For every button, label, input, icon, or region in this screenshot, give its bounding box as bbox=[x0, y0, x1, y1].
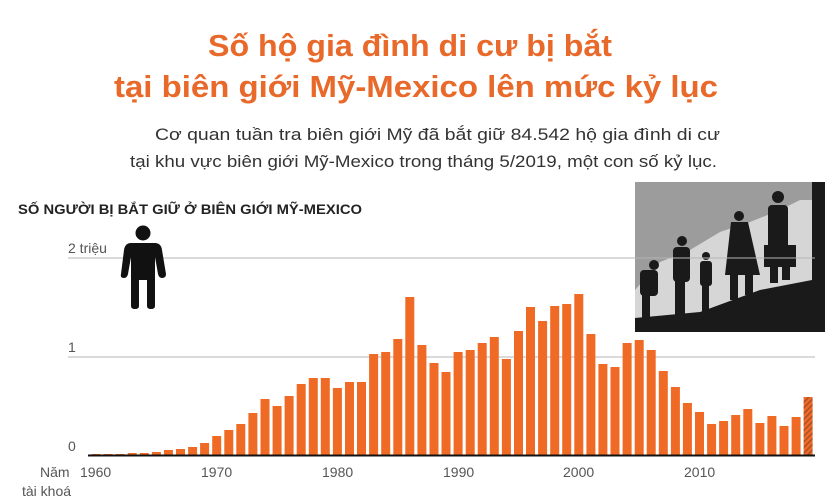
x axis bbox=[88, 454, 815, 456]
year labels: 2010 bbox=[684, 464, 715, 480]
chart title: SỐ NGƯỜI BỊ BẮT GIỮ Ở BIÊN GIỚI MỸ-MEXICO bbox=[18, 200, 362, 217]
year labels: 2000 bbox=[563, 464, 594, 480]
year labels bbox=[22, 464, 715, 499]
year labels: Năm bbox=[40, 464, 70, 480]
axis labels: 0 bbox=[68, 438, 76, 454]
subtitle: Cơ quan tuần tra biên giới Mỹ đã bắt giữ 84.542 hộ gia đình di cư bbox=[155, 125, 720, 144]
subtitle bbox=[130, 125, 720, 171]
icon: person bbox=[121, 226, 166, 309]
title: tại biên giới Mỹ-Mexico lên mức kỷ lục bbox=[114, 69, 718, 104]
axis labels: 1 bbox=[68, 339, 76, 355]
year labels: tài khoá bbox=[22, 483, 71, 499]
bar chart bbox=[92, 294, 801, 455]
axis labels: 2 triệu bbox=[68, 240, 107, 256]
year labels: 1980 bbox=[322, 464, 353, 480]
bar: 2019 hatched bbox=[804, 397, 813, 455]
title bbox=[114, 27, 718, 104]
photo: migrant silhouettes bbox=[635, 182, 825, 332]
subtitle: tại khu vực biên giới Mỹ-Mexico trong tháng 5/2019, một con số kỷ lục. bbox=[130, 152, 717, 171]
gridlines bbox=[68, 258, 815, 357]
year labels: 1990 bbox=[443, 464, 474, 480]
year labels: 1970 bbox=[201, 464, 232, 480]
title: Số hộ gia đình di cư bị bắt bbox=[208, 27, 612, 63]
axis labels bbox=[68, 240, 107, 454]
year labels: 1960 bbox=[80, 464, 111, 480]
